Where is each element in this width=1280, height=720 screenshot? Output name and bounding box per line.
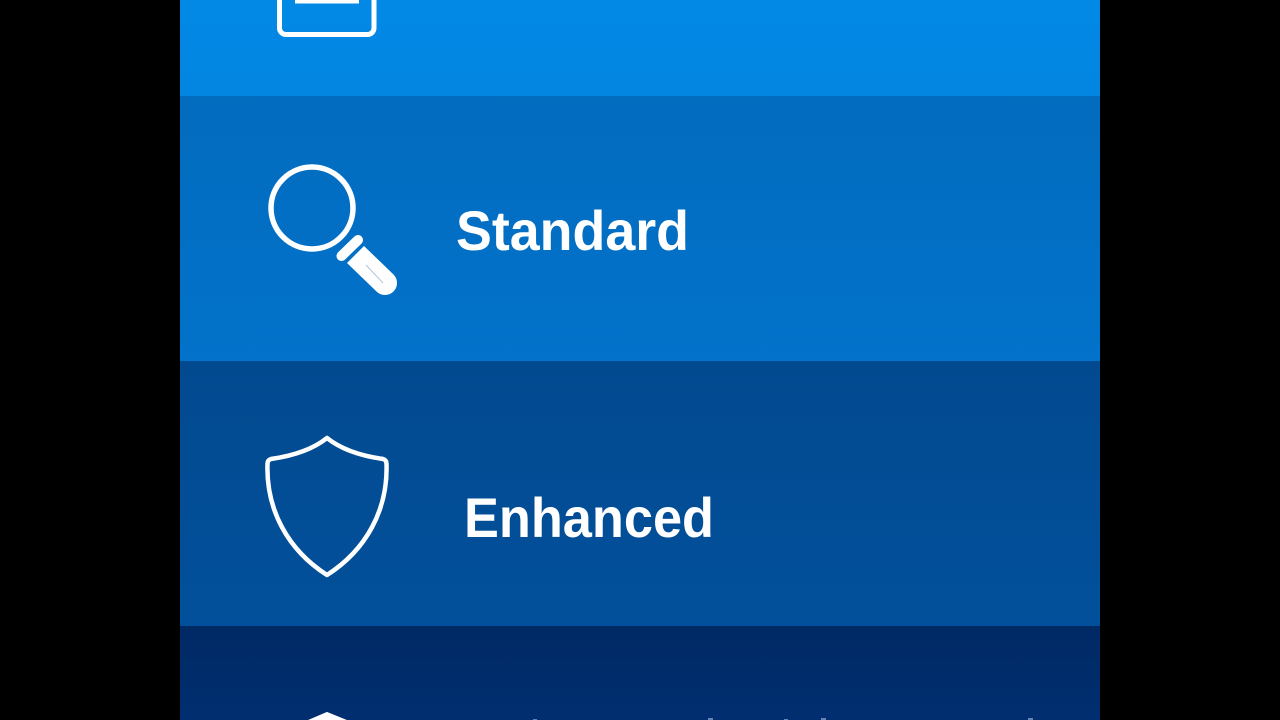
heading: Enhanced: Enhanced — [464, 486, 714, 549]
icon: magnifying glass — [271, 167, 397, 295]
panel: Standard — [180, 96, 1100, 361]
icon: card outline — [280, 0, 374, 34]
panel: top tier — [180, 0, 1100, 96]
cropped tips of the bottom heading — [533, 718, 1033, 720]
heading: Standard: Standard — [456, 199, 689, 262]
panel: Enhanced — [180, 361, 1100, 626]
panel: bottom tier — [180, 626, 1100, 720]
icon: shield — [267, 438, 387, 575]
icon: cropped top of bottom icon — [307, 712, 348, 720]
